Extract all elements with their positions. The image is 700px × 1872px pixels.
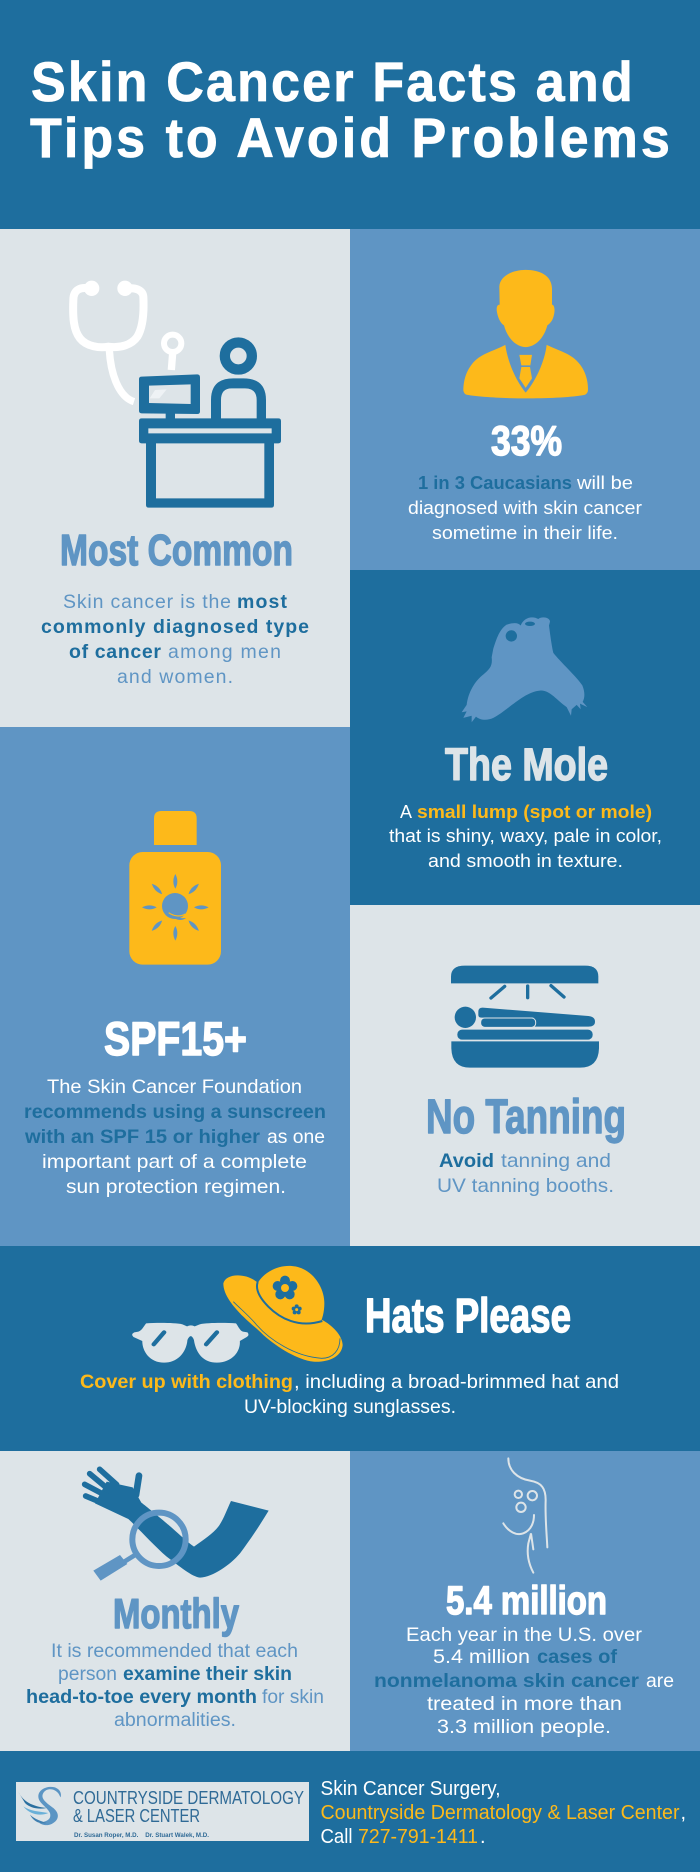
text: 33 percent body: will be (576, 472, 633, 493)
heading: 5.4 million: 5.4 million (446, 1579, 607, 1623)
panel: the mole (350, 570, 700, 905)
panel: no tanning (350, 905, 700, 1246)
icon: stethoscope and doctor at desk (73, 281, 281, 508)
text: spf15 body (24, 1076, 326, 1198)
text: most common body: among men (168, 641, 281, 663)
text: 5.4 million body: 5.4 million (433, 1646, 530, 1668)
text: contact details: . (480, 1826, 486, 1848)
text: contact details: Countryside Dermatology & Laser Center (320, 1802, 680, 1824)
text: 33 percent body: sometime in their life. (432, 522, 618, 543)
text: hats please body: , including a broad-brimmed hat and (294, 1371, 619, 1393)
text: no tanning body: Avoid (439, 1150, 494, 1172)
text: 5.4 million body: Each year in the U.S. over (406, 1624, 643, 1646)
text: monthly body: examine their skin (123, 1664, 292, 1685)
text: the mole body: that is shiny, waxy, pale in color, (389, 825, 662, 846)
text: monthly body: for skin (262, 1687, 324, 1708)
text: 5.4 million body: nonmelanoma skin cancer (374, 1670, 639, 1692)
logo: countryside dermatology (16, 1782, 309, 1841)
footer (0, 1751, 700, 1872)
icon: arm under magnifying glass (85, 1469, 269, 1581)
text: 5.4 million body: cases of (537, 1646, 618, 1668)
text: contact details: Skin Cancer Surgery, (320, 1778, 500, 1800)
text: spf15 body: with an SPF 15 or higher (24, 1126, 260, 1148)
icon: tanning bed (451, 966, 599, 1068)
header banner (0, 0, 700, 229)
text: contact details (320, 1778, 686, 1848)
text: monthly body: abnormalities. (114, 1710, 236, 1731)
heading: 33%: 33% (491, 417, 562, 464)
text: hats please body: UV-blocking sunglasses. (244, 1396, 456, 1418)
panel: 33 percent (350, 229, 700, 570)
text: hats please body (80, 1371, 619, 1418)
icon: sun hat (223, 1266, 343, 1362)
text: monthly body: person (58, 1664, 117, 1685)
title: Tips to Avoid Problems (30, 107, 670, 169)
text: the mole body: and smooth in texture. (428, 850, 623, 871)
text: no tanning body (437, 1150, 614, 1197)
text: monthly body: It is recommended that each (51, 1641, 298, 1662)
heading: no tanning: No Tanning (426, 1091, 626, 1144)
text: 33 percent body: 1 in 3 Caucasians (418, 472, 572, 493)
title (30, 51, 670, 169)
icon: sunscreen bottle (129, 811, 221, 965)
text: most common body: commonly diagnosed type (41, 616, 309, 638)
text: 5.4 million body: 3.3 million people. (437, 1716, 611, 1738)
text: contact details: 727-791-1411 (358, 1826, 478, 1848)
text: the mole body: A (400, 801, 413, 822)
icon: swan (18, 1787, 61, 1825)
icon: mole (462, 617, 587, 722)
heading: most common: Most Common (60, 526, 293, 575)
text: hats please body: Cover up with clothing (80, 1371, 293, 1393)
heading: hats please: Hats Please (365, 1290, 571, 1343)
text: 5.4 million body: treated in more than (427, 1693, 622, 1715)
text: most common body (41, 591, 309, 688)
text: monthly body (26, 1641, 324, 1731)
text: 5.4 million body (374, 1624, 674, 1738)
text: 33 percent body (408, 472, 642, 543)
text: contact details: Call (320, 1826, 352, 1848)
icon: sunglasses (132, 1323, 248, 1363)
logo: countryside dermatology: Dr. Susan Roper, M.D. Dr. Stuart Walek, M.D. (74, 1832, 209, 1839)
title: Skin Cancer Facts and (31, 51, 633, 113)
text: the mole body: small lump (spot or mole) (417, 801, 652, 822)
panel: monthly (0, 1451, 350, 1751)
text: contact details: , (680, 1802, 686, 1824)
text: most common body: Skin cancer is the (63, 591, 231, 613)
text: most common body: of cancer (69, 641, 161, 663)
text: 5.4 million body: are (646, 1670, 674, 1692)
text: 33 percent body: diagnosed with skin cancer (408, 497, 642, 518)
text: spf15 body: sun protection regimen. (66, 1176, 286, 1198)
logo: countryside dermatology: & LASER CENTER (73, 1806, 200, 1826)
text: no tanning body: UV tanning booths. (437, 1175, 614, 1197)
panel: hats please (0, 1246, 700, 1451)
heading: monthly: Monthly (113, 1590, 239, 1637)
panel: 5.4 million (350, 1451, 700, 1751)
text: no tanning body: tanning and (501, 1150, 611, 1172)
heading: the mole: The Mole (445, 739, 608, 790)
icon: body outline with skin spots (503, 1458, 547, 1573)
icon: man in suit (463, 270, 588, 398)
text: most common body: and women. (117, 666, 233, 688)
logo: countryside dermatology: COUNTRYSIDE DERMATOLOGY (73, 1788, 304, 1808)
heading: spf15+: SPF15+ (104, 1012, 247, 1065)
text: spf15 body: as one (267, 1126, 325, 1148)
text: most common body: most (237, 591, 288, 613)
text: monthly body: head-to-toe every month (26, 1687, 257, 1708)
text: spf15 body: The Skin Cancer Foundation (47, 1076, 302, 1098)
panel: most common (0, 229, 350, 727)
text: spf15 body: important part of a complete (42, 1151, 307, 1173)
text: the mole body (389, 801, 662, 871)
text: spf15 body: recommends using a sunscreen (24, 1101, 326, 1123)
panel: spf15 (0, 727, 350, 1246)
